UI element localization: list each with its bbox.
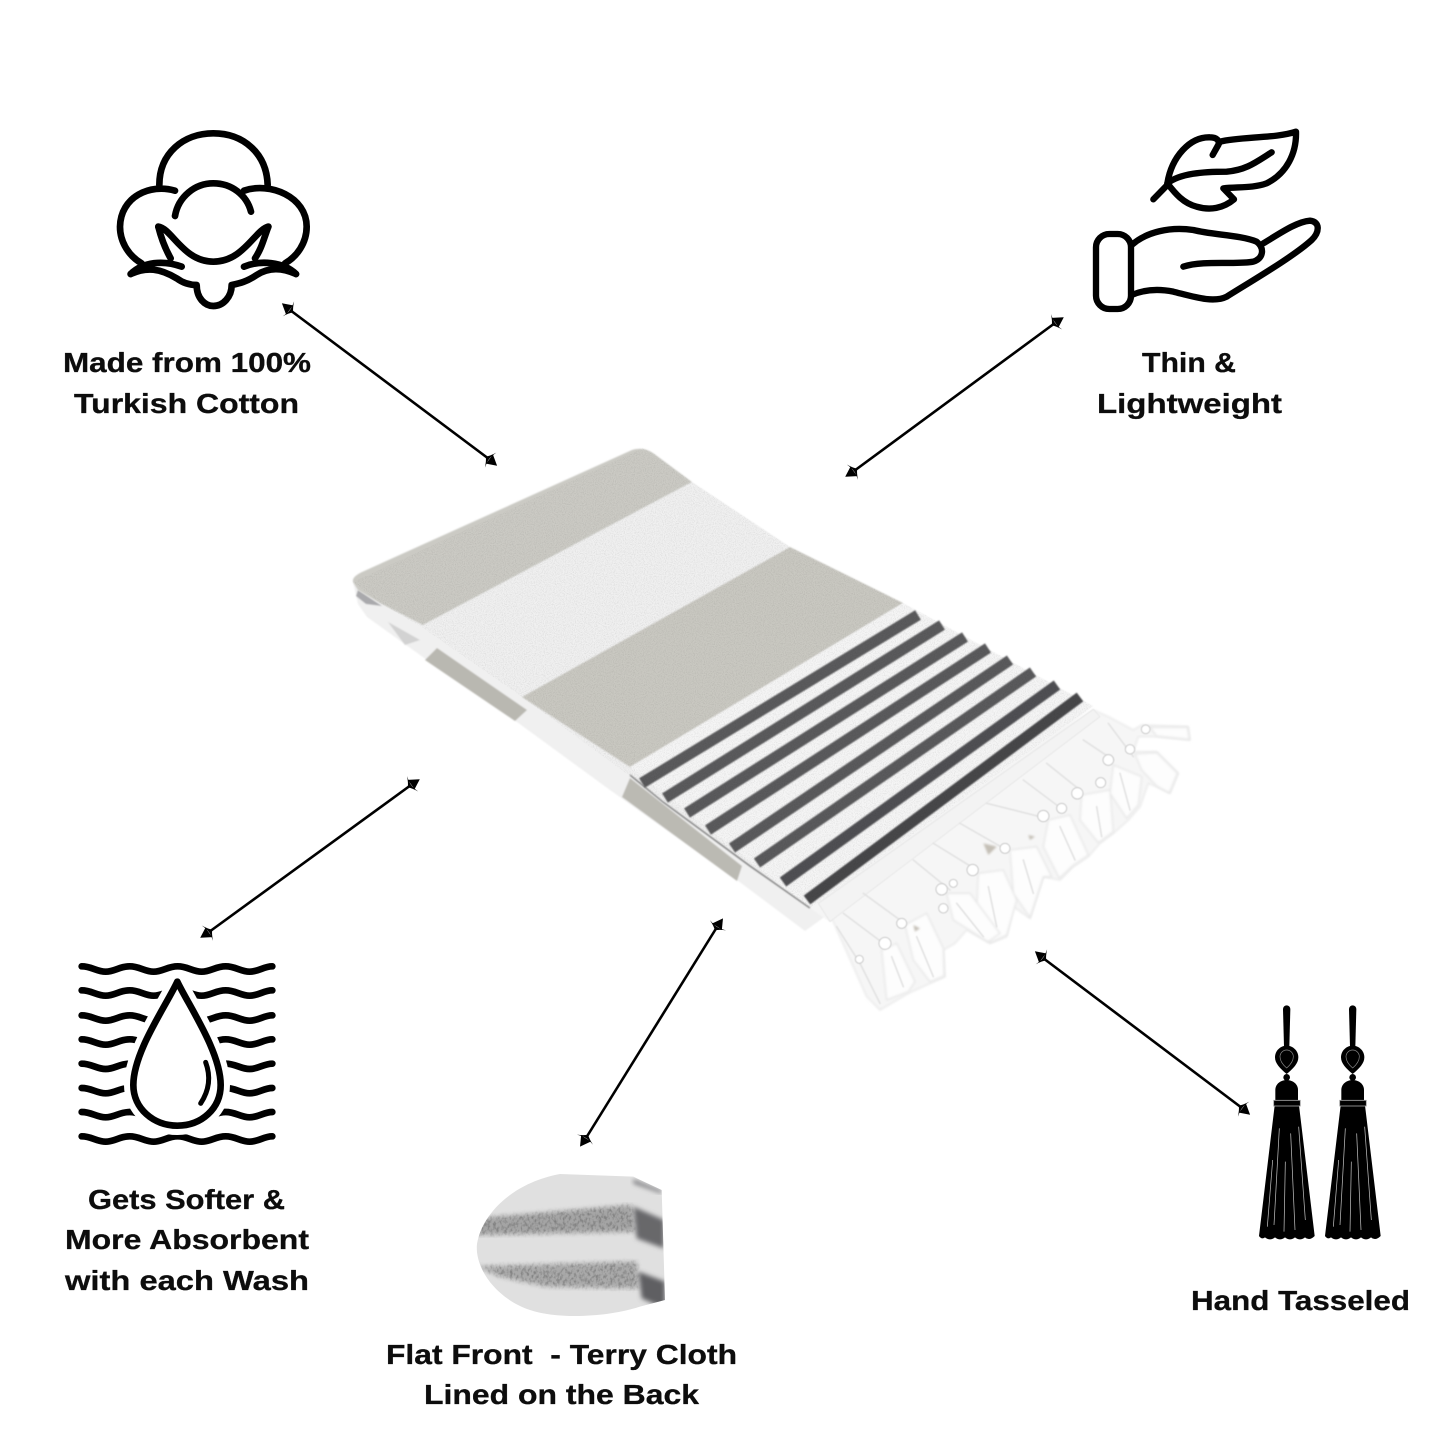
arrow: terry cloth to towel bbox=[572, 913, 731, 1152]
gray band: folded end bbox=[353, 449, 692, 625]
icon: two tassels bbox=[1259, 1005, 1381, 1239]
tassel left bbox=[1259, 1005, 1315, 1239]
label: Hand Tasseled: Hand Tasseled bbox=[1191, 1285, 1410, 1316]
knots bbox=[855, 725, 1150, 963]
icon: feather over open hand bbox=[1096, 132, 1318, 309]
tassel right bbox=[1325, 1005, 1381, 1239]
label: Flat Front - Terry Cloth Lined on the Back bbox=[386, 1339, 737, 1410]
towel top surface bbox=[353, 449, 1093, 922]
label: Thin & Lightweight: Lightweight bbox=[1097, 388, 1282, 419]
label: Flat Front - Terry Cloth Lined on the Back: Lined on the Back bbox=[424, 1379, 699, 1410]
shadow under top layer bbox=[630, 775, 810, 908]
label: Made from 100% Turkish Cotton: Made from 100% bbox=[63, 347, 311, 378]
charcoal stripes bbox=[642, 615, 1080, 900]
white band bbox=[423, 482, 790, 697]
strand shading bbox=[837, 723, 1133, 1003]
arrow: lightweight to towel bbox=[840, 309, 1069, 485]
icon: water drop and waves bbox=[82, 966, 272, 1142]
towel photo bbox=[340, 440, 1190, 1010]
label: Gets Softer & More Absorbent with each Wash: More Absorbent bbox=[65, 1224, 309, 1255]
label: Thin & Lightweight bbox=[1097, 347, 1282, 419]
label: Gets Softer & More Absorbent with each Wash: with each Wash bbox=[64, 1265, 309, 1296]
icon: cotton boll bbox=[120, 133, 307, 306]
striped end base bbox=[630, 603, 1093, 922]
arrow: tassels to towel bbox=[1029, 944, 1256, 1122]
label: Flat Front - Terry Cloth Lined on the Back: Flat Front - Terry Cloth bbox=[386, 1339, 737, 1370]
towel underside fold bbox=[353, 582, 832, 931]
fringe with knotted tassels bbox=[818, 709, 1190, 1010]
arrow: absorbent to towel bbox=[195, 771, 425, 946]
tassel tails bbox=[882, 727, 1189, 1000]
weave texture bbox=[354, 448, 1092, 907]
label: Gets Softer & More Absorbent with each Wash: Gets Softer & bbox=[88, 1184, 285, 1215]
fabric swatch: terry cloth close-up bbox=[476, 1174, 665, 1316]
label: Gets Softer & More Absorbent with each Wash bbox=[64, 1184, 309, 1296]
label: Made from 100% Turkish Cotton: Turkish Cotton bbox=[74, 388, 299, 419]
gray band: middle bbox=[522, 547, 903, 767]
gaps between tassels bbox=[913, 835, 1035, 932]
label: Thin & Lightweight: Thin & bbox=[1142, 347, 1236, 378]
label: Made from 100% Turkish Cotton bbox=[63, 347, 311, 419]
arrow: cotton to towel bbox=[276, 296, 503, 473]
